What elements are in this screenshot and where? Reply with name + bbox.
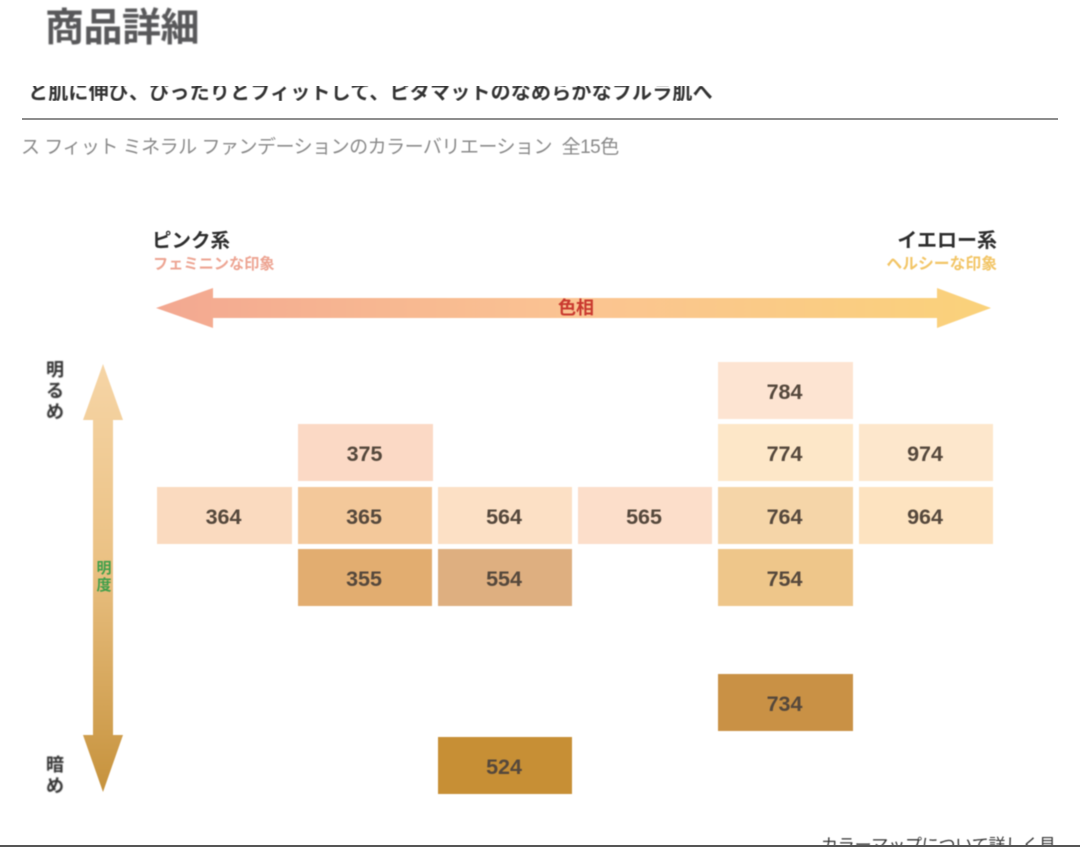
swatch 964: 964 [907,505,943,529]
swatch 565: 565 [626,505,662,529]
label: yellow tones: ヘルシーな印象 [886,256,997,273]
label: yellow tones [886,230,997,273]
label: pink tones [152,230,274,273]
swatch 734: 734 [767,692,802,716]
swatch 554 [438,549,572,606]
swatch 564: 564 [486,505,522,529]
swatch 964 [859,487,993,544]
arrow: hue [156,288,991,328]
swatch 754: 754 [767,567,802,591]
arrow: hue: 色相 [558,297,594,318]
swatch 355 [298,549,432,606]
swatch 364: 364 [206,505,241,529]
arrow: brightness: 明 [96,560,112,577]
swatch 365: 365 [346,505,382,529]
swatch 565 [578,487,712,544]
arrow: brightness [82,364,124,792]
swatch 524 [438,737,572,794]
swatch 784: 784 [767,380,802,404]
label: darker: 暗め [46,755,64,796]
swatch 375 [298,424,433,481]
swatch 774: 774 [767,442,802,466]
subtitle: ス フィット ミネラル ファンデーションのカラーバリエーション 全15色 [21,137,619,158]
bottom edge line [0,845,1080,847]
swatch 974 [859,424,993,481]
swatch 375: 375 [347,442,382,466]
label: pink tones: フェミニンな印象 [153,256,274,273]
swatch 524: 524 [486,755,522,779]
swatch 974: 974 [907,442,943,466]
swatch 764: 764 [767,505,802,529]
label: lighter: 明るめ [46,360,64,422]
swatch 764 [718,487,853,544]
label: yellow tones: イエロー系 [897,230,997,252]
arrow: brightness: 度 [96,576,112,594]
divider line [22,118,1058,120]
swatch 355: 355 [346,567,382,591]
swatch 365 [298,487,432,544]
swatch 774 [718,424,853,481]
swatch 784 [718,362,853,419]
label: pink tones: ピンク系 [152,230,230,252]
swatch 734 [718,674,853,731]
swatch 754 [718,549,853,606]
swatch 554: 554 [486,567,522,591]
title: 商品詳細 [45,7,199,50]
swatch 364 [157,487,292,544]
swatch 564 [438,487,572,544]
